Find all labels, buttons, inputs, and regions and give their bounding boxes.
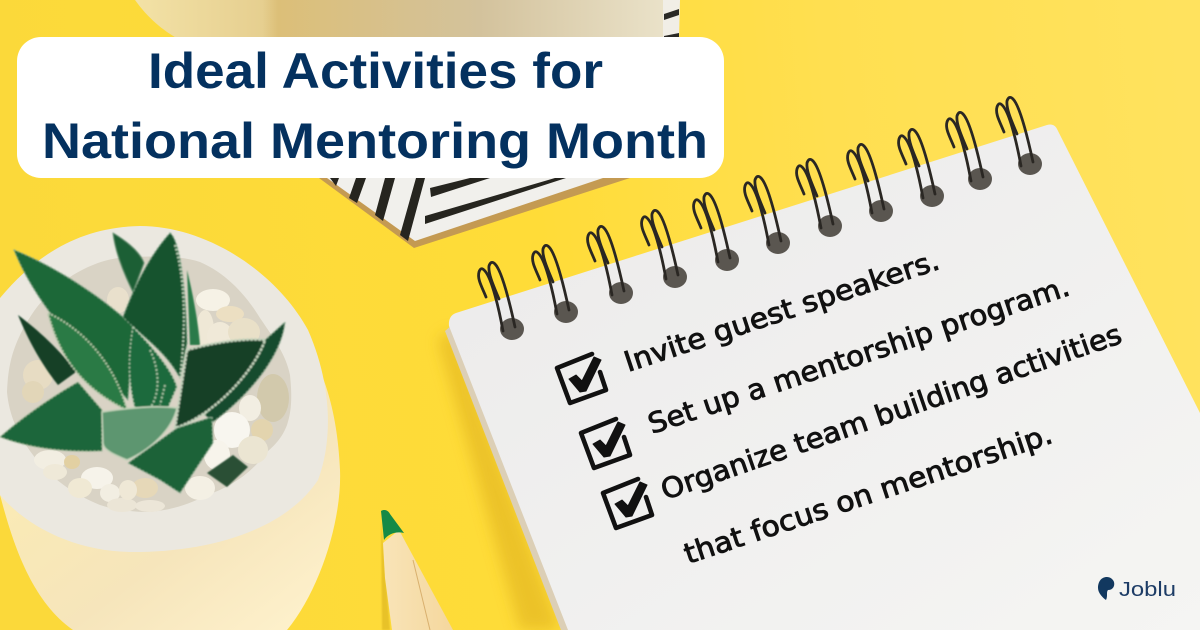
icon: checkbox 2 [581, 419, 630, 468]
title panel [17, 37, 724, 178]
pencil [381, 510, 453, 630]
spiral binding [479, 97, 1042, 340]
Joblu logo [1098, 577, 1176, 601]
notebook paper [449, 124, 1200, 630]
notebook [438, 97, 1200, 630]
icon: checkbox 1 [557, 354, 606, 403]
gravel [22, 287, 289, 512]
checklist item 2 [581, 270, 1074, 468]
pot interior [7, 257, 291, 512]
checklist item 1 [557, 244, 944, 403]
icon: checkbox 3 [603, 479, 652, 528]
succulent leaves [0, 233, 285, 493]
checklist item 3: Organize team building activities [657, 318, 1126, 507]
cup at top of the scene [135, 0, 680, 40]
striped coaster [319, 178, 630, 248]
pot rim [0, 226, 328, 552]
checklist item 1: Invite guest speakers. [620, 244, 944, 379]
checklist item 3: that focus on mentorship. [680, 417, 1056, 571]
pot body [0, 370, 340, 630]
notebook page stack [445, 325, 575, 630]
pencil shadow [381, 520, 390, 630]
checklist item 3 [603, 318, 1126, 571]
Joblu logo: Joblu [1119, 578, 1176, 601]
checklist item 2: Set up a mentorship program. [644, 270, 1074, 441]
notebook shadow [438, 330, 560, 630]
title text [42, 43, 708, 169]
plant pot [0, 226, 340, 630]
icon: logo mark [1098, 577, 1114, 600]
title text: Ideal Activities for [148, 43, 603, 99]
title text: National Mentoring Month [42, 113, 708, 169]
